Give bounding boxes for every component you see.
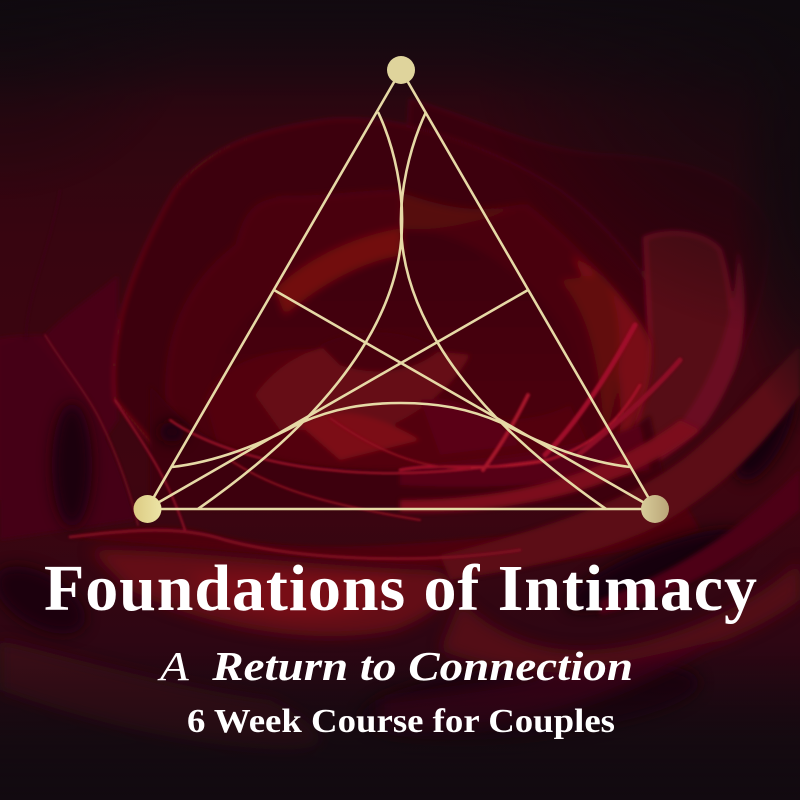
node: top	[387, 56, 415, 84]
logo: sacred geometry triangle	[134, 56, 669, 523]
right ribbon band	[400, 345, 800, 615]
node: right	[641, 495, 669, 523]
node: left	[134, 495, 162, 523]
middle petals	[168, 192, 651, 470]
course descriptor: 6 Week Course for Couples	[187, 703, 615, 740]
vignette overlays	[730, 0, 800, 440]
arc: right sweep	[401, 112, 606, 509]
bright petal rims	[26, 190, 680, 559]
outer back petals	[0, 100, 768, 540]
subtitle: A Return to Connection	[157, 643, 633, 689]
inner whorl	[205, 332, 600, 470]
title: Foundations of Intimacy	[44, 552, 757, 625]
triangle outline	[147, 70, 655, 509]
dark pockets	[0, 371, 800, 754]
large bottom petals	[0, 550, 800, 750]
median lines	[147, 290, 655, 509]
arc: left sweep	[198, 112, 402, 509]
arc: lower sweep	[172, 403, 630, 467]
lower petal sheets	[70, 385, 700, 566]
